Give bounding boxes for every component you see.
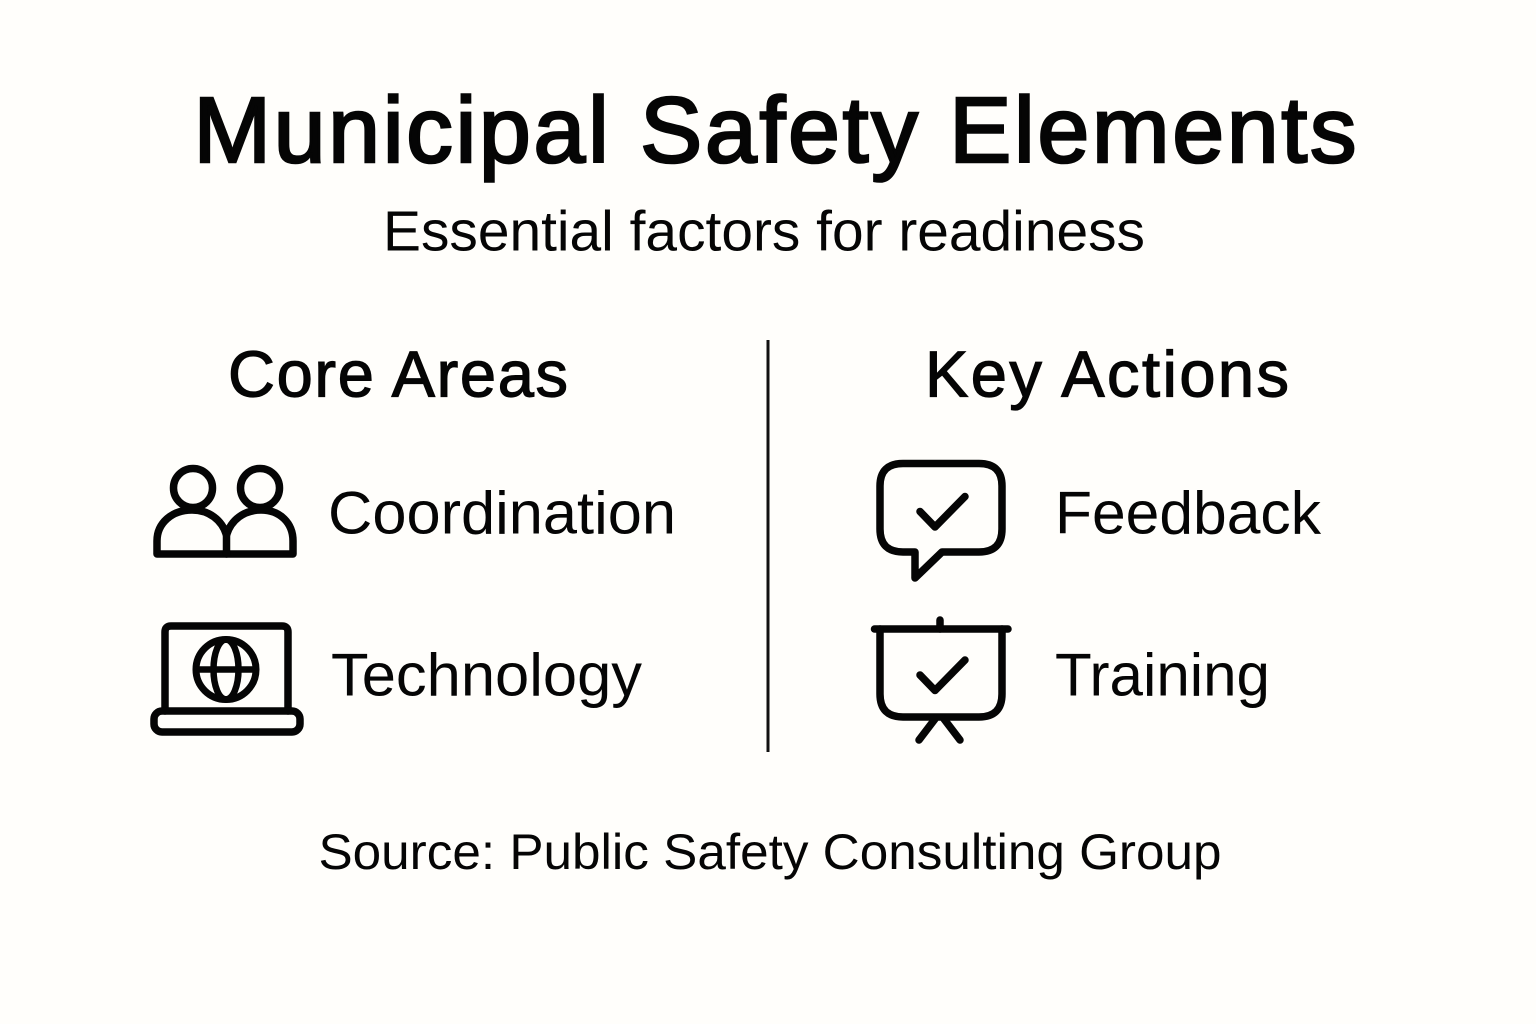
icon: presentation board with check <box>874 620 1008 740</box>
source: Source: Public Safety Consulting Group <box>318 824 1222 880</box>
heading: key actions: Key Actions <box>925 338 1289 410</box>
label: technology: Technology <box>331 642 642 708</box>
title: Municipal Safety Elements <box>194 78 1356 182</box>
subtitle: Essential factors for readiness <box>383 200 1145 264</box>
icon: people <box>157 468 293 554</box>
icon: laptop with globe <box>154 626 300 732</box>
heading: core areas: Core Areas <box>228 338 568 410</box>
divider <box>766 340 770 752</box>
label: feedback: Feedback <box>1055 480 1322 546</box>
label: coordination: Coordination <box>328 480 676 546</box>
label: training: Training <box>1055 642 1270 708</box>
icon: speech bubble with check <box>880 464 1002 578</box>
